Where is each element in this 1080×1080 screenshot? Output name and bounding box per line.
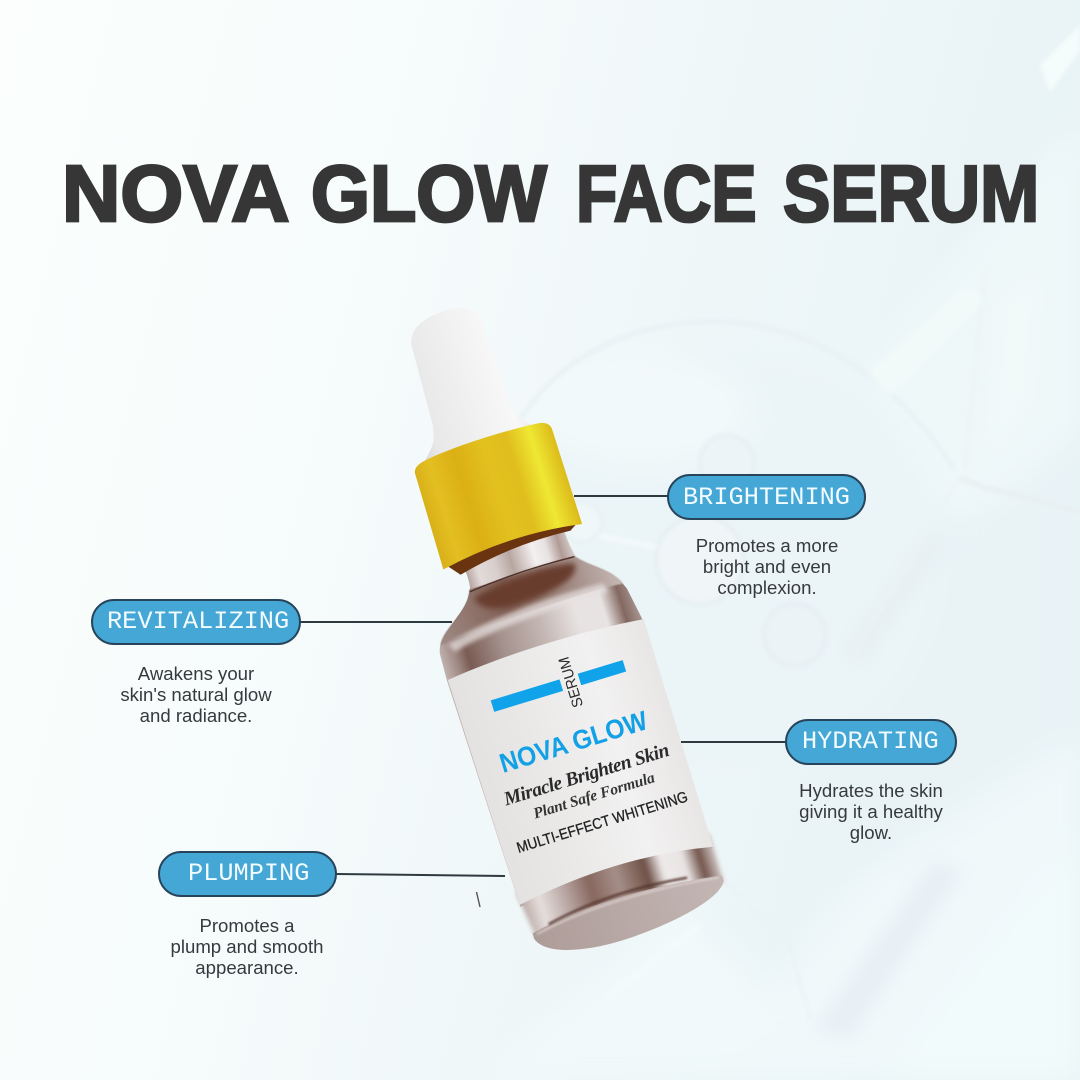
title: FACE [576, 149, 756, 238]
label tagline: Miracle Brighten Skin [500, 740, 672, 811]
pill: plumping [159, 852, 336, 896]
brown glass ring [446, 520, 581, 578]
heading: revitalizing: REVITALIZING [107, 607, 289, 636]
description: plumping: Promotes a [199, 915, 295, 936]
neck ring line [469, 556, 575, 592]
label bar left [491, 679, 563, 712]
description: revitalizing: skin's natural glow [120, 684, 272, 705]
rim shadow line [546, 874, 688, 924]
label word serum: SERUM [556, 655, 587, 709]
shoulder brown shadow [472, 560, 581, 616]
heading: hydrating: HYDRATING [802, 727, 939, 756]
callout: plumping [159, 852, 505, 978]
title: NOVA [62, 149, 289, 239]
serum bottle [343, 282, 732, 967]
description: hydrating: giving it a healthy [799, 801, 944, 822]
rim light line [535, 871, 719, 934]
description: brightening: Promotes a more [696, 535, 838, 556]
shoulder light stripe [444, 581, 612, 653]
description: revitalizing: Awakens your [138, 663, 254, 684]
small stray tick mark [476, 892, 480, 907]
description: hydrating: Hydrates the skin [799, 780, 943, 801]
pill: hydrating [786, 720, 956, 764]
description: plumping: appearance. [195, 957, 299, 978]
white product label [446, 614, 713, 907]
callout: brightening [574, 475, 865, 598]
label effect: MULTI-EFFECT WHITENING [515, 788, 690, 857]
base rim and face [530, 867, 732, 965]
label bar right [578, 660, 626, 685]
title [62, 148, 1039, 239]
white dropper bulb [384, 295, 537, 462]
description: revitalizing: and radiance. [140, 705, 252, 726]
bottle shoulder and body [423, 542, 713, 908]
title: SERUM [783, 150, 1039, 239]
lower metal band [516, 833, 724, 940]
description: hydrating: glow. [850, 822, 892, 843]
description: brightening: complexion. [717, 577, 817, 598]
heading: plumping: PLUMPING [188, 859, 309, 888]
heading: brightening: BRIGHTENING [683, 483, 850, 512]
callout: revitalizing [92, 600, 452, 726]
bottle neck [459, 522, 577, 593]
label formula: Plant Safe Formula [531, 769, 657, 822]
description: plumping: plump and smooth [171, 936, 323, 957]
title: GLOW [311, 148, 547, 238]
upper shoulder tone [427, 544, 625, 646]
pill: revitalizing [92, 600, 300, 644]
label brand name: NOVA GLOW [496, 705, 651, 779]
gold collar [410, 418, 583, 570]
pill: brightening [668, 475, 865, 519]
callout: hydrating [681, 720, 956, 843]
description: brightening: bright and even [703, 556, 831, 577]
